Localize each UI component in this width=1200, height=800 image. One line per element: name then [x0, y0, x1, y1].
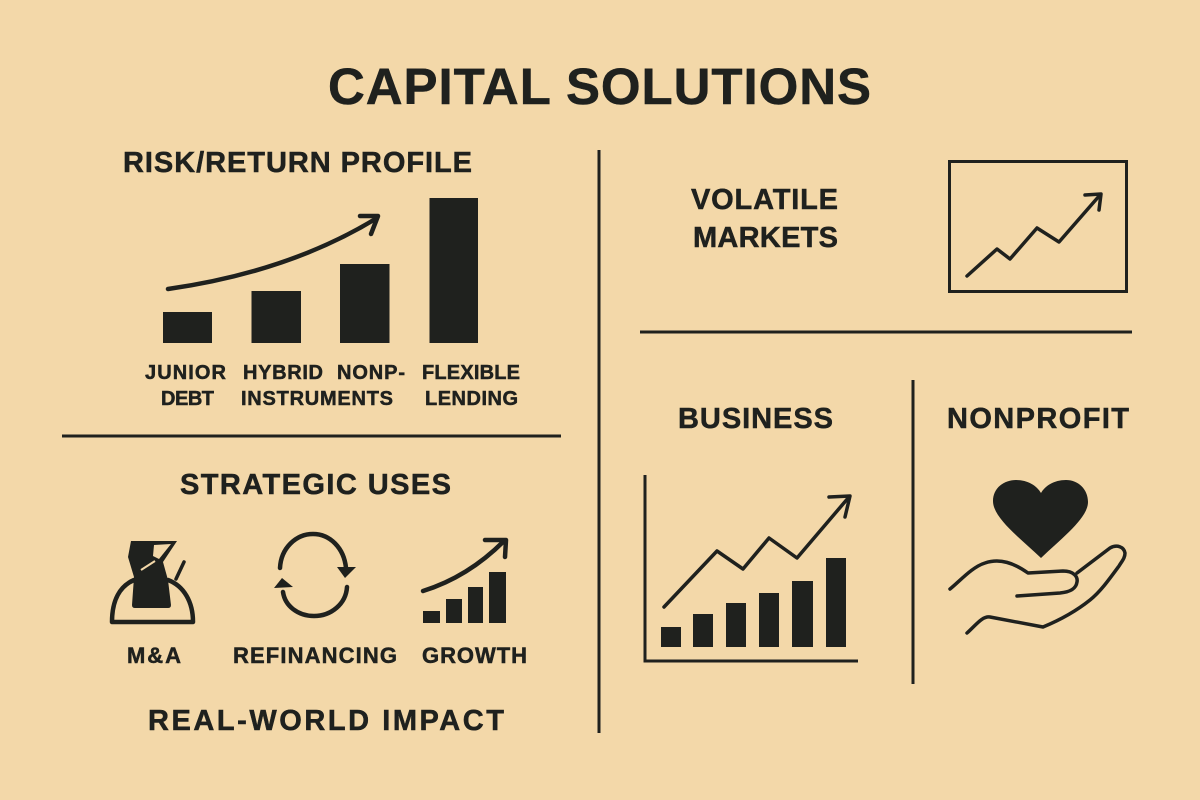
bar labels: LENDING	[425, 388, 518, 410]
heading: nonprofit: NONPROFIT	[947, 403, 1129, 435]
heading: risk/return profile: RISK/RETURN PROFILE	[123, 147, 472, 179]
bar labels: INSTRUMENTS	[241, 388, 393, 410]
icon: M&A	[112, 541, 193, 622]
label: growth: GROWTH	[422, 643, 527, 668]
panel: business	[645, 403, 858, 661]
bar chart: risk and return	[163, 198, 478, 343]
label: M&A: M&A	[127, 643, 181, 668]
label: refinancing: REFINANCING	[233, 643, 397, 668]
arrow: rising return	[168, 216, 378, 289]
title: CAPITAL SOLUTIONS	[328, 58, 871, 115]
heading: volatile markets: VOLATILE	[691, 184, 838, 216]
panel: strategic uses	[112, 469, 527, 668]
icon: growth	[423, 540, 506, 623]
heading: strategic uses: STRATEGIC USES	[180, 469, 451, 501]
heading: volatile markets: MARKETS	[693, 222, 838, 254]
icon: refinancing	[274, 534, 356, 616]
bar labels: HYBRID	[243, 362, 323, 384]
bar labels	[145, 362, 520, 410]
panel: risk/return profile	[123, 147, 520, 410]
heading: volatile markets	[691, 184, 838, 254]
heading: business: BUSINESS	[678, 403, 833, 435]
icon: framed line chart	[950, 162, 1126, 292]
panel: nonprofit	[947, 403, 1129, 633]
chart: business growth	[645, 475, 858, 661]
panel: volatile markets	[691, 162, 1126, 292]
icon: heart in hand	[950, 480, 1125, 633]
bar labels: DEBT	[161, 388, 214, 410]
bar labels: NONP-	[337, 362, 405, 384]
heading: real-world impact: REAL-WORLD IMPACT	[148, 705, 504, 737]
bar labels: JUNIOR	[145, 362, 227, 384]
bar labels: FLEXIBLE	[422, 362, 520, 384]
